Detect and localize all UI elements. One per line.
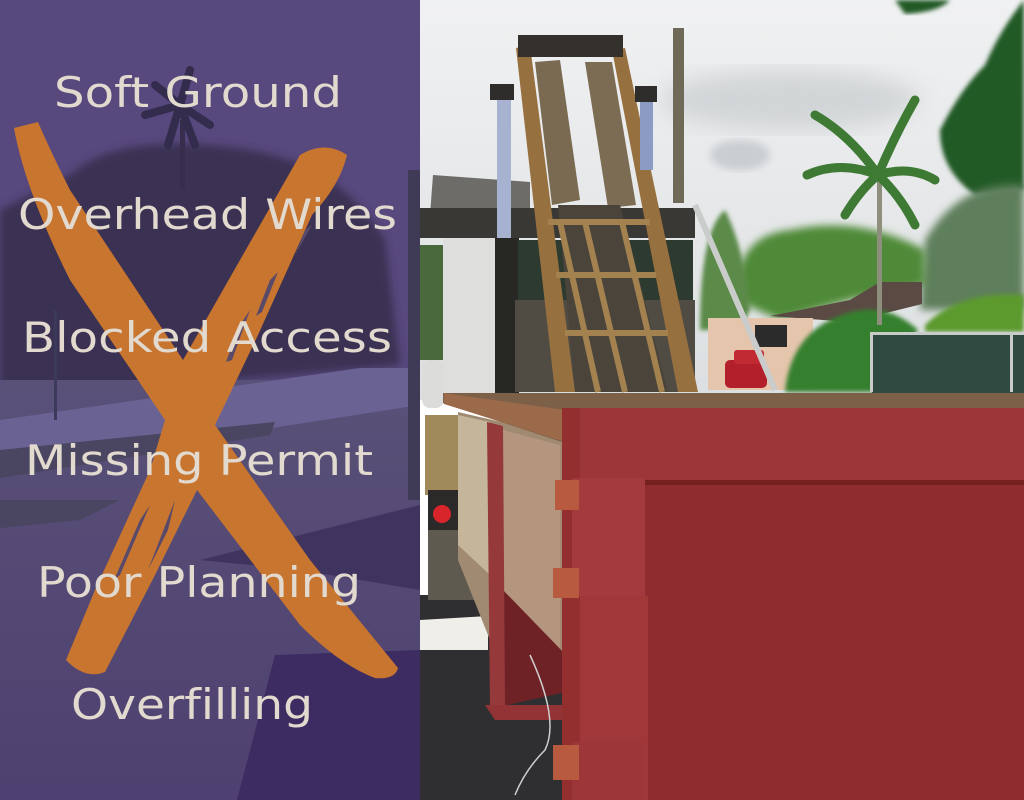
dumpster side xyxy=(458,412,580,700)
label: Overhead Wires: Overhead Wires xyxy=(18,190,397,239)
palm tree xyxy=(807,100,935,325)
icon: orange X xyxy=(14,122,398,678)
truck rear and light xyxy=(425,415,487,600)
label: Soft Ground: Soft Ground xyxy=(54,68,342,117)
label: Overfilling: Overfilling xyxy=(71,680,313,729)
label: Blocked Access: Blocked Access xyxy=(22,313,392,362)
truck cab xyxy=(420,175,695,408)
hoist arm frame xyxy=(490,35,775,392)
photo background: sky xyxy=(420,0,1024,400)
red car xyxy=(725,350,767,388)
road xyxy=(420,595,585,800)
photo background: trees and house xyxy=(420,0,1024,393)
dumpster xyxy=(443,393,1024,800)
door strip and hinges xyxy=(572,478,645,596)
text: list of problems xyxy=(18,68,397,729)
panel: purple overlay with street scene xyxy=(0,0,420,800)
label: Missing Permit: Missing Permit xyxy=(25,436,373,485)
top rim xyxy=(443,393,1024,443)
utility pole xyxy=(673,28,684,203)
label: Poor Planning: Poor Planning xyxy=(37,558,361,607)
dumpster front face xyxy=(562,408,1024,800)
